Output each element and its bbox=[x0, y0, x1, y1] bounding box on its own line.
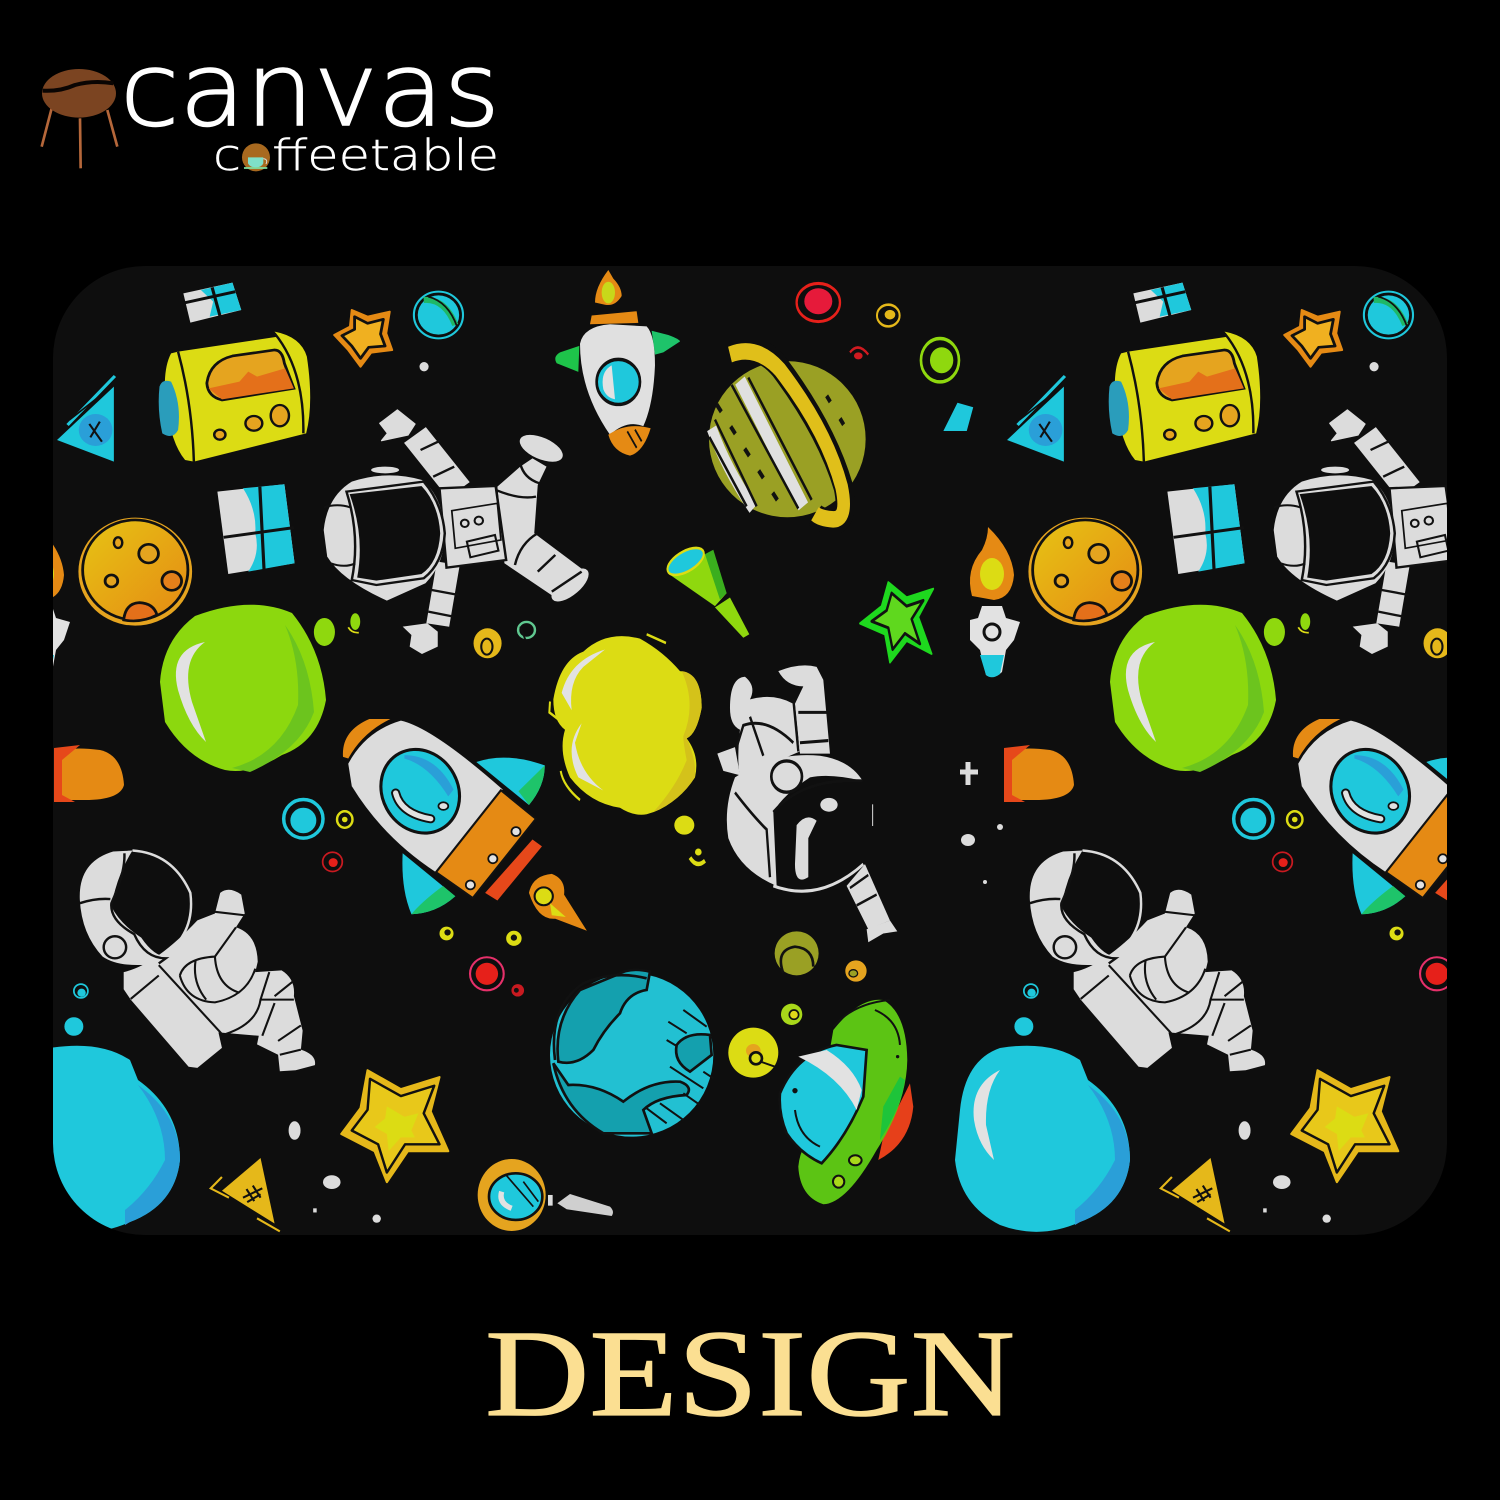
icon: teal ball bbox=[414, 292, 463, 338]
small planets, top centre bbox=[797, 283, 959, 382]
repeated pattern tile, second copy bbox=[955, 283, 1500, 1232]
panel: space themed mat bbox=[5, 266, 1500, 1235]
icon: coffee bean table bbox=[42, 69, 117, 168]
dot bbox=[419, 362, 429, 371]
icon: astronaut with helmet up-left bbox=[80, 851, 315, 1071]
icon: large gift box bbox=[217, 484, 295, 574]
icon: ringed olive planet bbox=[709, 349, 866, 522]
debris dots bbox=[289, 1121, 381, 1223]
wordmark: coffeetable: coffeetable bbox=[213, 131, 499, 181]
icon: cyan shard bbox=[945, 404, 972, 430]
wordmark: canvas: canvas bbox=[120, 31, 500, 150]
icon: yellow blob planet bbox=[549, 634, 705, 864]
icon: flame and mini rocket bbox=[20, 527, 70, 677]
icon: yellow star bbox=[341, 1070, 448, 1182]
icon: big rocket bbox=[343, 719, 545, 914]
icon: telescope bbox=[665, 542, 749, 638]
icon: cyan triangle bbox=[57, 376, 115, 462]
icon: rocket flame bbox=[529, 874, 587, 931]
icon: orange capsule bbox=[10, 745, 124, 802]
small planets, bottom centre bbox=[775, 931, 867, 1025]
stray dots bbox=[11, 824, 53, 884]
icon: green blob planet bbox=[160, 605, 326, 772]
icon: top rocket bbox=[555, 270, 680, 456]
icon: earth planet bbox=[550, 970, 713, 1137]
heading: DESIGN: DESIGN bbox=[485, 1305, 1015, 1442]
icon: yellow canister bbox=[159, 332, 310, 462]
logo: canvas coffeetable bbox=[42, 31, 500, 181]
icon: green star bbox=[860, 582, 933, 662]
icon: blue blob planet bbox=[5, 1046, 180, 1232]
mat background bbox=[53, 266, 1447, 1235]
icon: coffee cup in the letter o bbox=[242, 143, 270, 171]
icon: orange star bbox=[334, 310, 392, 367]
icon: yellow ball with antenna bbox=[728, 1028, 778, 1078]
icon: astronaut upside down bbox=[717, 665, 897, 942]
small bubbles bbox=[64, 800, 524, 1036]
icon: UFO bbox=[780, 1000, 913, 1204]
icon: small gift box bbox=[183, 283, 241, 323]
repeating pattern tile bbox=[5, 283, 594, 1232]
icon: orange moon bbox=[78, 518, 192, 626]
small rings near astronaut bbox=[314, 613, 535, 658]
icon: astronaut floating with arms spread bbox=[324, 410, 594, 654]
icon: magnifying glass bbox=[478, 1159, 613, 1231]
icon: yellow triangle with hash bbox=[211, 1158, 280, 1231]
